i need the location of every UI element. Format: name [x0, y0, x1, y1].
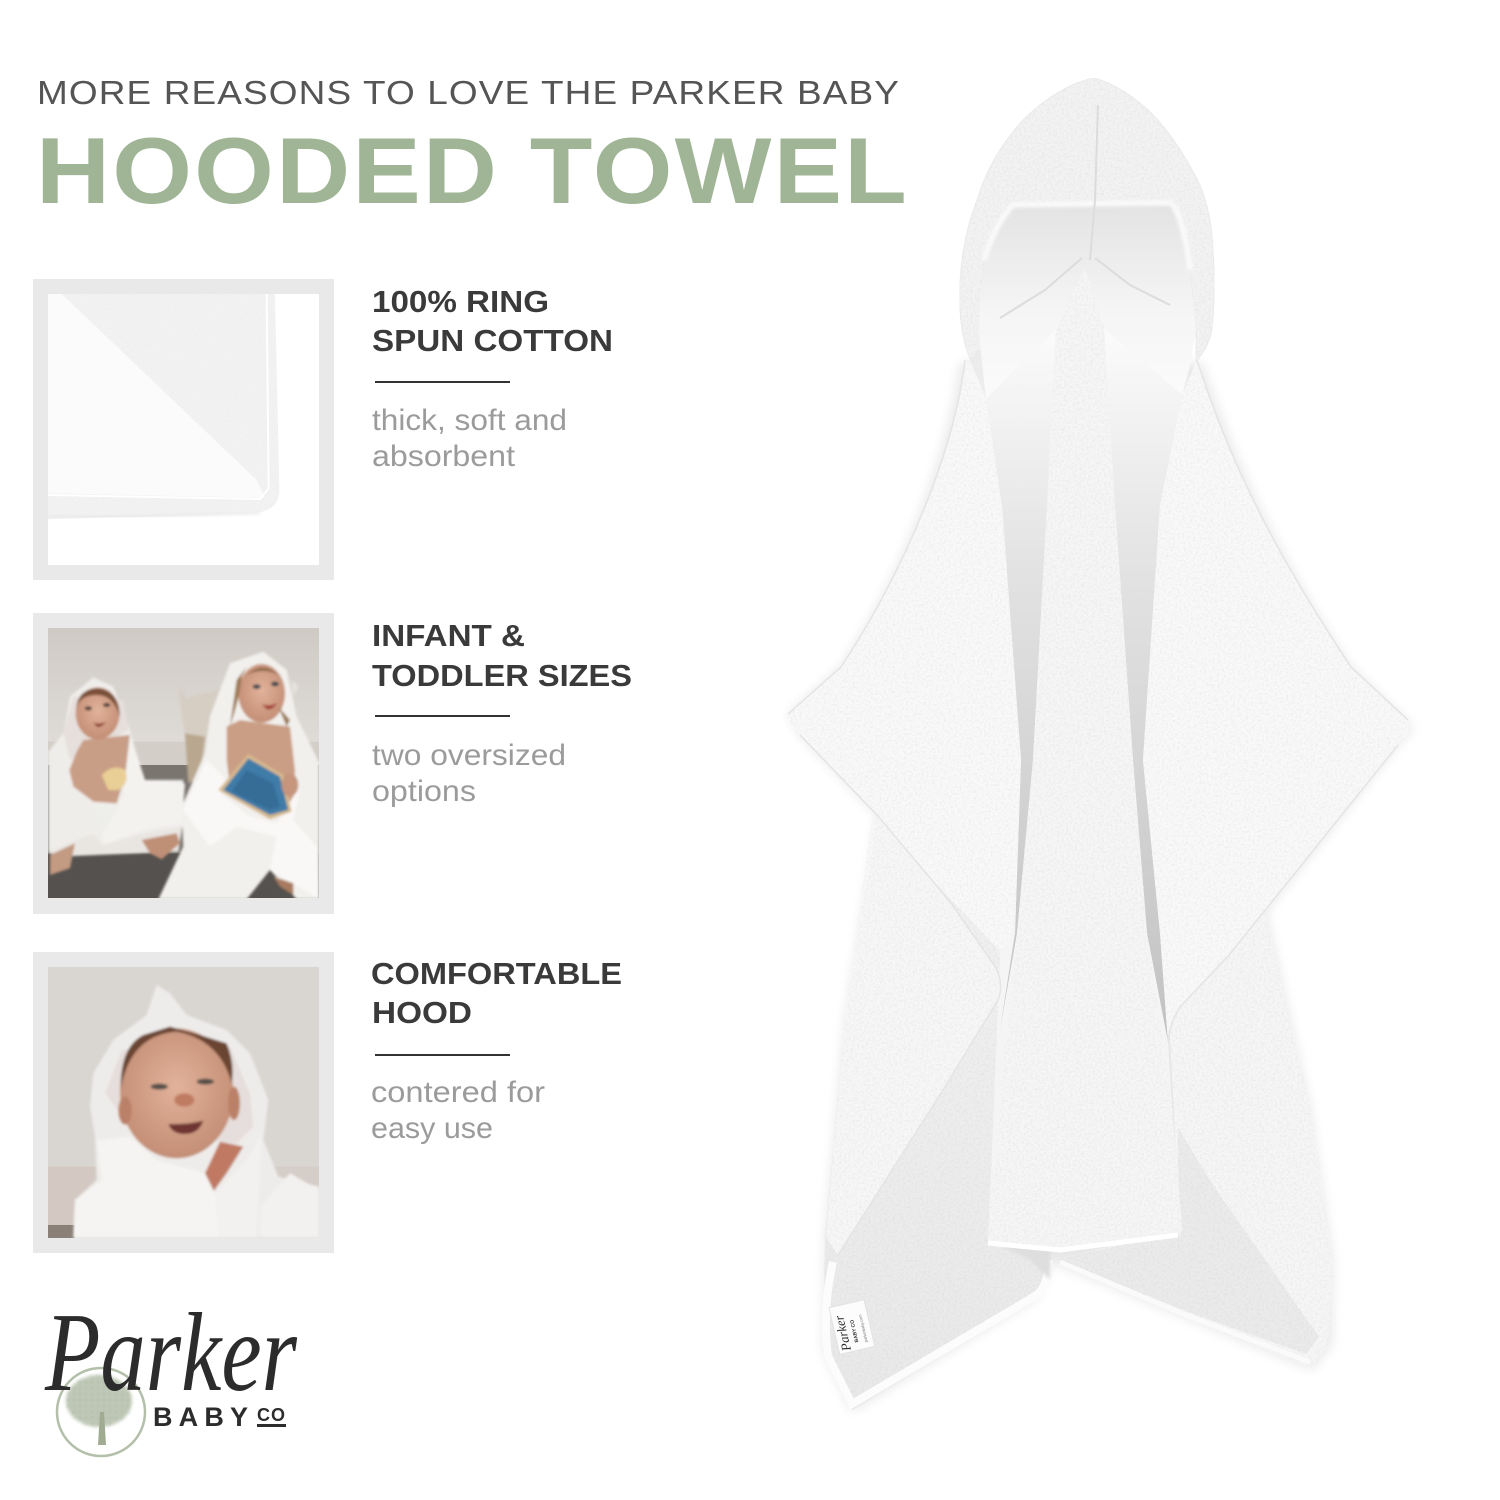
back layer right grey inner: [1057, 1128, 1319, 1354]
wing left: [788, 360, 1021, 1255]
underside shadow below center: [1000, 1245, 1051, 1280]
towel label: parkerbaby.com: [857, 1313, 869, 1343]
towel label: [829, 1300, 875, 1355]
center panel hem: [988, 1235, 1178, 1250]
title: HOODED TOWEL: [36, 118, 909, 223]
text: sizes feature: two oversized: [372, 739, 566, 772]
wedge right: [1104, 328, 1182, 1042]
back layer left white edge: [826, 1260, 1049, 1404]
back layer left: [823, 816, 1051, 1410]
text: hood feature: [371, 956, 622, 1145]
text: hood feature: COMFORTABLE: [371, 956, 622, 991]
text: sizes feature: options: [372, 775, 476, 808]
text: cotton feature: [372, 284, 613, 473]
towel label: BABY CO: [849, 1319, 860, 1343]
hood: [960, 78, 1214, 362]
panel: laughing baby photo: [33, 952, 334, 1253]
center panel: [988, 268, 1182, 1250]
text: cotton feature: SPUN COTTON: [372, 323, 613, 358]
logo: Parker Baby Co: BABY: [153, 1402, 248, 1432]
towel soft shadow: [788, 363, 1414, 1412]
panel: toddlers photo: [33, 613, 334, 914]
hood brim highlight: [984, 203, 1190, 270]
interior backing: [968, 280, 1190, 1245]
wing left lower strip: [826, 816, 1001, 1255]
text: sizes feature: INFANT &: [372, 618, 525, 653]
left baby: [48, 677, 183, 852]
piping lines: [788, 360, 1408, 1255]
logo: Parker Baby Co: [44, 1291, 297, 1456]
text: cotton feature: thick, soft and: [372, 404, 567, 437]
back layer right light: [1057, 870, 1333, 1368]
basket: [180, 691, 218, 742]
back right hem: [1060, 1262, 1310, 1362]
logo: Parker Baby Co: Parker: [44, 1291, 297, 1415]
hood seams: [1000, 105, 1170, 318]
logo: Parker Baby Co: CO: [257, 1405, 285, 1425]
text: cotton feature: 100% RING: [372, 284, 549, 319]
panel: cotton photo: [33, 279, 334, 580]
wing right: [1143, 360, 1414, 1042]
towel product photo: [788, 78, 1414, 1412]
towel label: Parker: [831, 1313, 854, 1354]
text: hood feature: contered for: [371, 1076, 545, 1109]
text: hood feature: easy use: [371, 1112, 493, 1145]
rug: [48, 820, 183, 856]
text: sizes feature: [372, 618, 632, 808]
text: sizes feature: TODDLER SIZES: [372, 658, 632, 693]
hood interior: [980, 203, 1196, 399]
text: cotton feature: absorbent: [372, 440, 516, 473]
wedge left: [986, 328, 1057, 1030]
intro heading line: MORE REASONS TO LOVE THE PARKER BABY: [37, 74, 900, 111]
right baby: [158, 652, 319, 899]
text: hood feature: HOOD: [372, 995, 472, 1030]
